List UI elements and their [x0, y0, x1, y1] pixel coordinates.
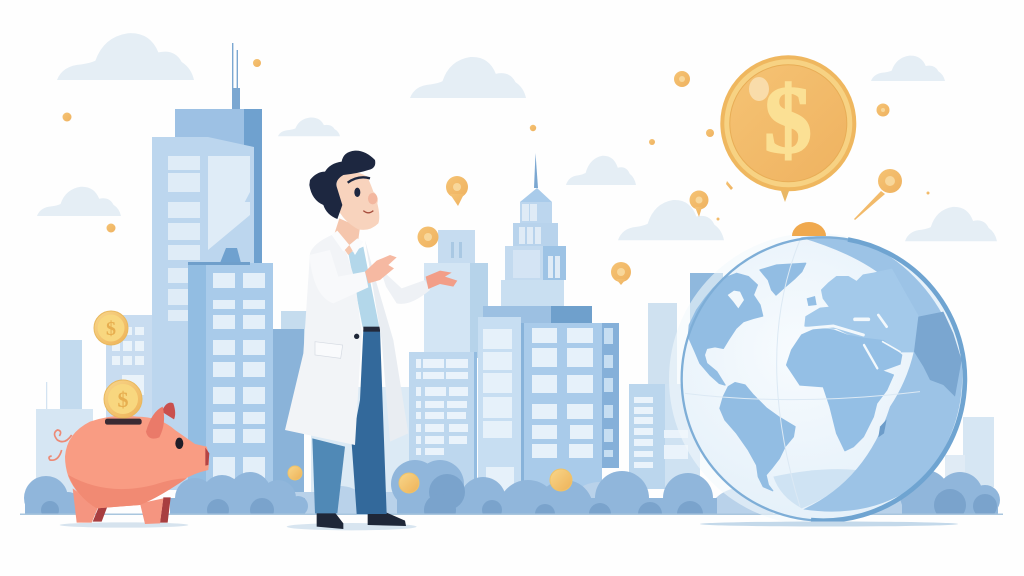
glass halo [669, 233, 961, 525]
shaded ocean [800, 236, 962, 512]
hudson bay [728, 291, 744, 308]
africa and arabia [787, 328, 902, 451]
north america [688, 273, 763, 385]
far arm [380, 268, 430, 304]
coat pocket [315, 342, 343, 358]
grid and rim [682, 237, 965, 521]
shadow [287, 523, 417, 530]
steeple tower [501, 153, 566, 306]
globe shadow [700, 522, 958, 526]
hair [309, 151, 375, 219]
near arm [309, 250, 368, 303]
eurasia [805, 269, 918, 352]
far hand [426, 271, 457, 289]
coat button [354, 334, 359, 339]
far legs [93, 497, 171, 523]
coin above slot [104, 380, 142, 418]
front left building [188, 248, 304, 494]
belly shade [68, 475, 187, 508]
eye [175, 438, 183, 449]
britain [807, 296, 817, 306]
face [337, 172, 379, 230]
far back buildings [36, 273, 994, 500]
big coin [720, 55, 856, 202]
coat [285, 235, 362, 445]
near legs [73, 488, 163, 524]
ground line [20, 514, 1003, 515]
globe [669, 233, 966, 525]
man [285, 151, 457, 530]
ear [325, 197, 338, 210]
upper falling coin [94, 311, 128, 345]
body [65, 416, 209, 508]
left skyscraper [152, 43, 262, 490]
tail [49, 430, 72, 460]
slot [105, 419, 142, 425]
nose [368, 193, 377, 204]
pale patch bottom [773, 469, 857, 508]
shoes [317, 513, 406, 529]
seas [807, 315, 900, 368]
ear [162, 403, 175, 419]
shadow [60, 522, 188, 528]
madagascar [878, 419, 887, 437]
snout tip [205, 448, 209, 466]
ground coins [288, 466, 572, 493]
greenland [760, 263, 806, 295]
dollar sign: $ [764, 66, 812, 173]
smile [363, 211, 373, 213]
asia shaded [914, 312, 962, 397]
near hand [365, 255, 397, 283]
eyebrow [348, 177, 370, 183]
bushes [24, 460, 1000, 514]
belt [363, 327, 380, 332]
center left building [409, 352, 477, 497]
small floating coins [62, 59, 930, 285]
small left building [106, 315, 163, 485]
eye [354, 188, 360, 197]
shirt [348, 247, 379, 327]
center main buildings [478, 306, 619, 495]
tower windows [168, 156, 250, 321]
south america [720, 383, 795, 491]
trousers [352, 330, 387, 514]
upper falling coin: $ [106, 318, 116, 340]
dark bush shadows [41, 474, 997, 514]
right building [629, 384, 700, 489]
collar [332, 231, 363, 255]
clouds [37, 33, 997, 241]
piggy bank [49, 403, 209, 528]
antenna [232, 43, 240, 112]
coin above slot: $ [118, 387, 128, 412]
neck [334, 218, 360, 255]
main bush domes [24, 460, 1000, 514]
pale back bushes [295, 482, 902, 514]
center back tower [424, 230, 488, 358]
coin on globe top [792, 222, 826, 236]
